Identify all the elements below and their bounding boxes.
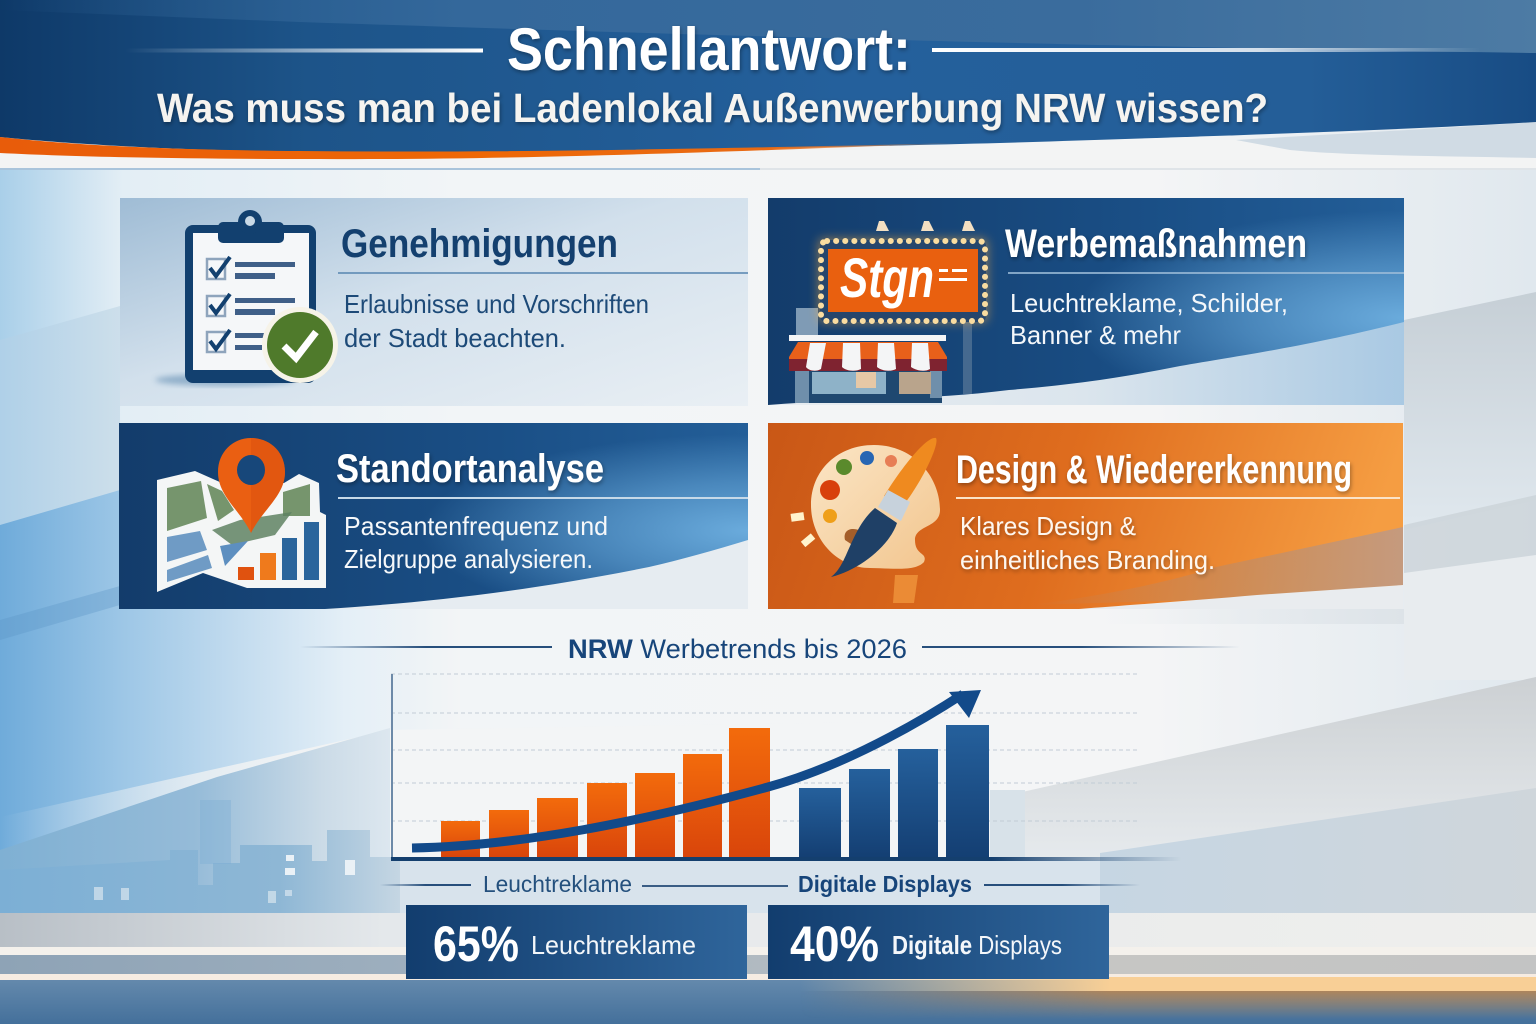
icon: clipboard with check — [155, 210, 338, 386]
floor stripes — [0, 913, 1536, 1024]
panel: Genehmigungen — [120, 198, 748, 406]
heading: Design & Wiedererkennung — [956, 448, 1352, 492]
stat: 40% Digitale Displays: Digitale Displays — [892, 930, 1062, 960]
body text: der Stadt beachten. — [344, 323, 566, 353]
stat: 65% Leuchtreklame: 65% — [433, 916, 519, 972]
panel: Standortanalyse — [119, 423, 748, 609]
bars: Digitale Displays — [799, 725, 989, 857]
icon: shop with illuminated sign — [789, 221, 988, 403]
body text: einheitliches Branding. — [960, 545, 1215, 575]
body text: Klares Design & — [960, 511, 1136, 541]
stat: 65% Leuchtreklame: Leuchtreklame — [531, 930, 696, 960]
body text — [344, 289, 649, 353]
header banner — [0, 0, 1536, 170]
chart legend labels — [380, 871, 1140, 897]
body text: Zielgruppe analysieren. — [344, 544, 593, 574]
chart legend labels: Digitale Displays — [798, 871, 972, 897]
body text — [1010, 288, 1288, 350]
stat: 65% Leuchtreklame — [406, 905, 747, 979]
body text — [960, 511, 1215, 575]
title: Schnellantwort: — [507, 16, 911, 83]
icon: shop with illuminated sign: Stgn — [840, 246, 934, 309]
bars: Leuchtreklame — [441, 728, 770, 857]
body text: Leuchtreklame, Schilder, — [1010, 288, 1288, 318]
panel: Werbemaßnahmen — [768, 198, 1404, 405]
chart heading: NRW Werbetrends bis 2026 — [568, 634, 907, 664]
stat: 40% Digitale Displays: 40% — [790, 916, 879, 972]
panel: Design & Wiedererkennung — [768, 423, 1403, 609]
orange accent stripe — [0, 137, 960, 159]
trend arrow — [412, 690, 981, 848]
icon: palette and brush — [791, 438, 940, 603]
body text: Erlaubnisse und Vorschriften — [344, 289, 649, 319]
body text: Passantenfrequenz und — [344, 511, 608, 541]
bar chart — [391, 674, 1181, 861]
icon: map with pin and bars — [157, 438, 326, 592]
heading: Werbemaßnahmen — [1005, 222, 1307, 266]
title: Was muss man bei Ladenlokal Außenwerbung NRW wissen? — [157, 85, 1268, 131]
body text — [344, 511, 608, 574]
heading: Standortanalyse — [336, 447, 604, 491]
chart legend labels: Leuchtreklame — [483, 871, 632, 897]
stat: 40% Digitale Displays — [768, 905, 1109, 979]
skyline silhouette — [0, 800, 400, 913]
title — [125, 16, 1480, 131]
heading: Genehmigungen — [341, 222, 618, 266]
body text: Banner & mehr — [1010, 320, 1181, 350]
